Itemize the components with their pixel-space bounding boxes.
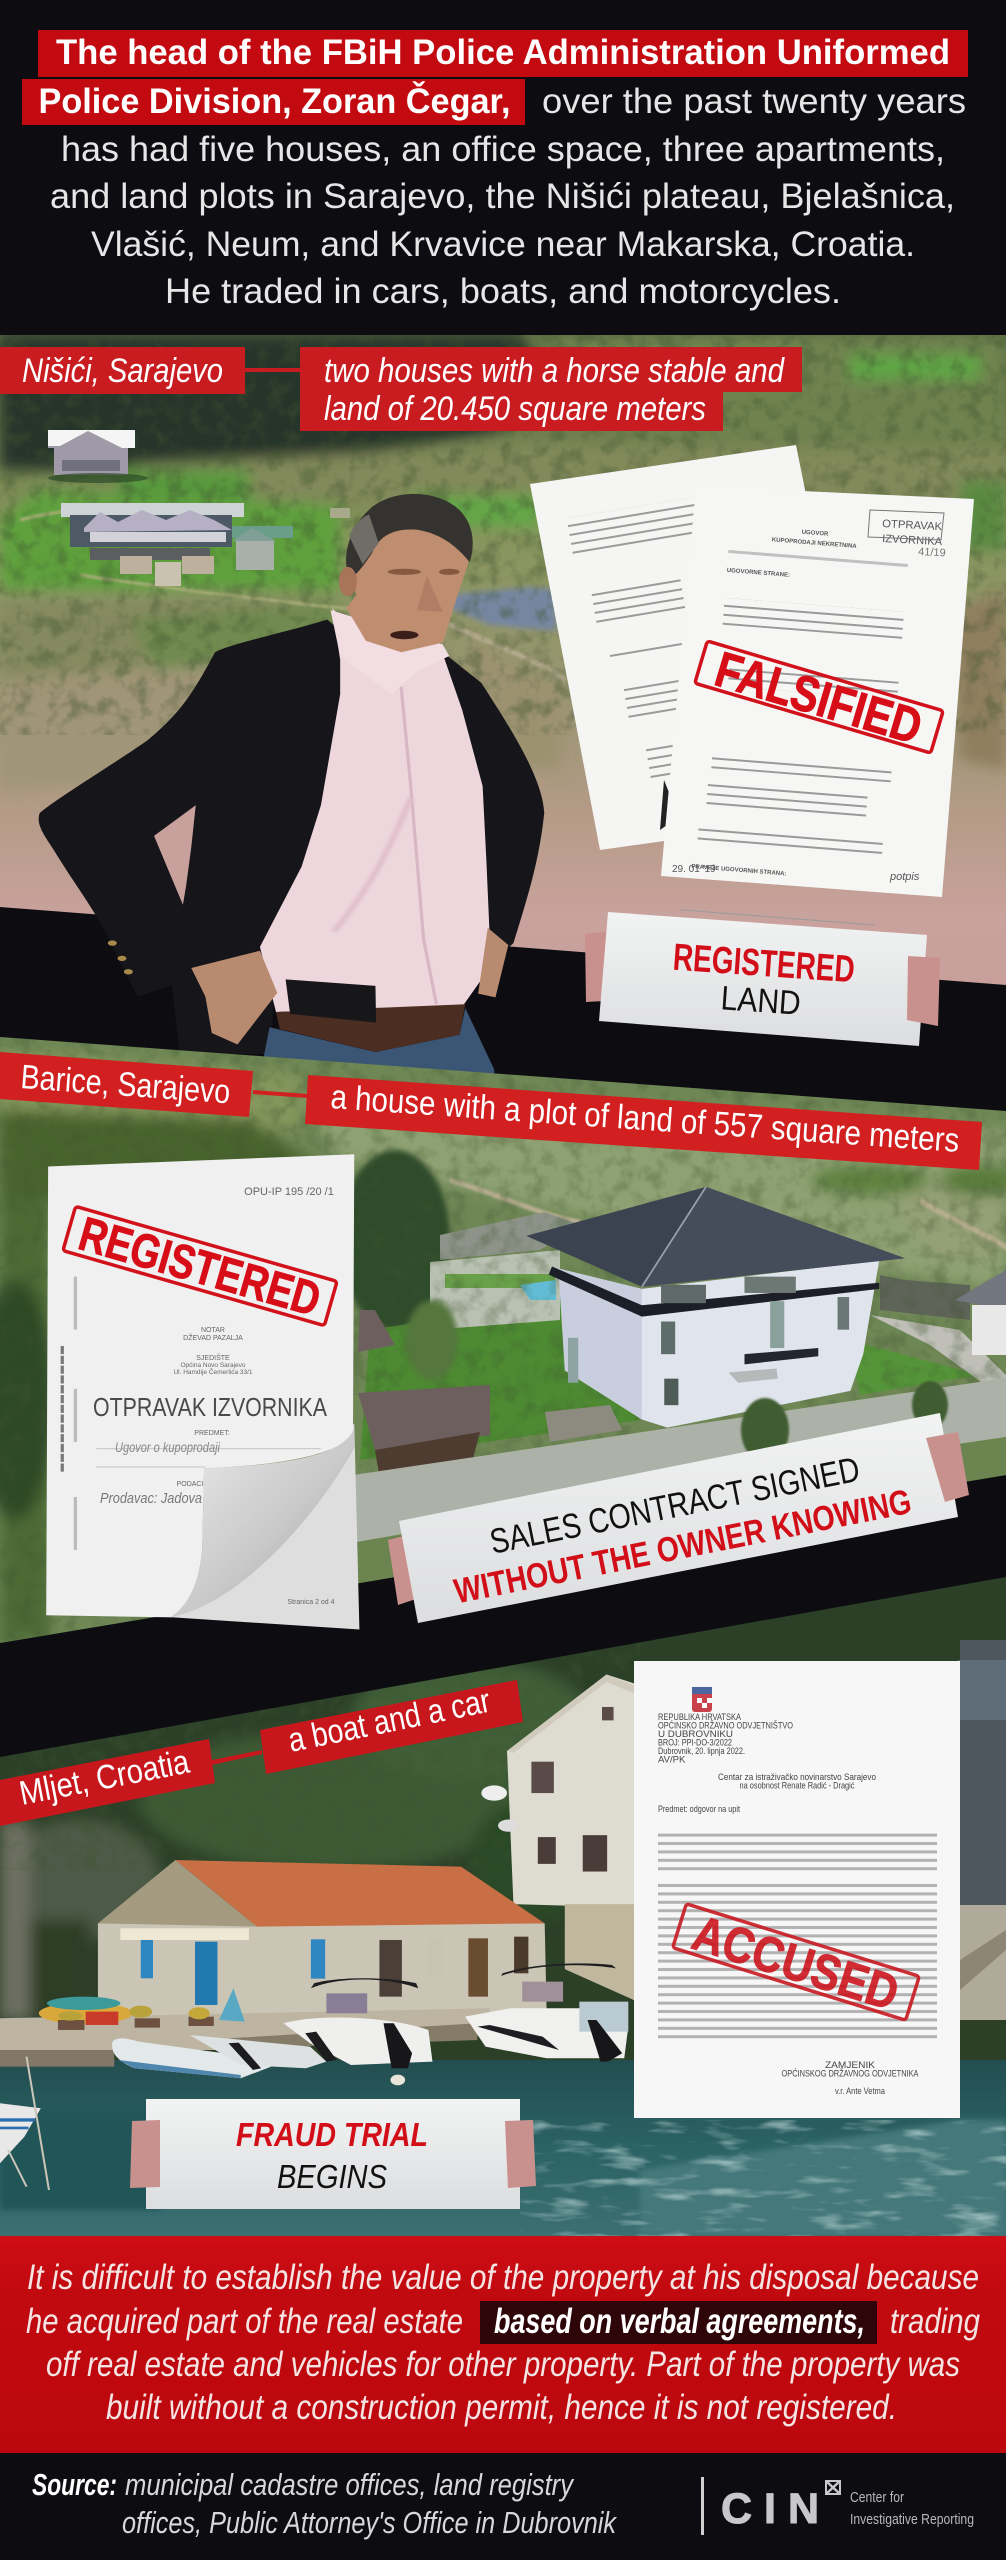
document: notary contract with curled page: OPU-IP 195 /20 /1 — [244, 1186, 334, 1198]
label: two houses with a horse stable: land of 20.450 square meters — [324, 390, 706, 428]
paper: land document front page: 29. 01 '19 — [672, 864, 716, 875]
outboard motors — [228, 2043, 261, 2070]
lake — [449, 587, 556, 631]
document: notary contract with curled page — [46, 1154, 359, 1630]
document: prosecutor letter: v.r. Ante Vetma — [835, 2086, 886, 2097]
stamp: REGISTERED: REGISTERED — [73, 1208, 326, 1327]
paper: land document front page: OTPRAVAK — [882, 518, 943, 533]
panel: Mljet harbour photo — [0, 1570, 1006, 2240]
stamp: FALSIFIED: FALSIFIED — [709, 641, 928, 755]
card: sales contract signed without the owner knowing — [388, 1413, 969, 1623]
intro heading text block: The head of the FBiH Police Administration Uniformed — [56, 33, 950, 72]
document: notary contract with curled page: PREDMET: — [194, 1430, 230, 1437]
paper: land document front page: PRAVEŽE UGOVORNIH STRANA: — [691, 862, 787, 877]
paper: land document front page: IZVORNIKA — [882, 533, 943, 548]
card: registered land: REGISTERED — [672, 937, 856, 991]
label: Barice, Sarajevo: Barice, Sarajevo — [19, 1058, 232, 1111]
highlight: based on verbal agreements: based on verbal agreements, — [494, 2302, 865, 2341]
label: Mljet, Croatia: Mljet, Croatia — [16, 1743, 192, 1813]
label: two houses with a horse stable — [300, 347, 802, 431]
document: notary contract with curled page: Ugovor o kupoprodaji — [115, 1439, 221, 1455]
panel: Nišići landscape photo — [0, 335, 1006, 985]
intro heading text block: Vlašić, Neum, and Krvavice near Makarska, Croatia. — [91, 225, 915, 264]
connector line — [253, 1090, 308, 1098]
card: fraud trial begins — [130, 2099, 536, 2209]
paper: land document back page — [530, 445, 870, 864]
dirt path — [450, 1180, 1006, 1250]
source credit: Source: — [32, 2467, 117, 2502]
paper: land document front page: UGOVOR — [801, 530, 829, 538]
kayaks and planters — [38, 2006, 132, 2024]
document: notary contract with curled page: SJEDIŠTE — [196, 1353, 230, 1362]
logo: CIN Center for Investigative Reporting: Investigative Reporting — [850, 2511, 974, 2528]
document: prosecutor letter: OPĆINSKO DRŽAVNO ODVJETNIŠTVO — [658, 1720, 793, 1732]
document: prosecutor letter: OPĆINSKOG DRŽAVNOG ODVJETNIKA — [782, 2068, 919, 2080]
intro heading text block: over the past twenty years — [542, 82, 966, 121]
white house behind — [481, 1674, 642, 2004]
foliage texture — [0, 1030, 1006, 1650]
label: two houses with a horse stable: two houses with a horse stable and — [324, 352, 785, 390]
paper: land document front page: UGOVORNE STRANE: — [727, 568, 790, 579]
connector line — [245, 368, 300, 372]
paper: land document front page: potpis — [889, 871, 920, 883]
small shed roofs — [358, 1270, 1006, 1480]
document: notary contract with curled page: Stranica 2 od 4 — [287, 1599, 335, 1606]
document: notary contract with curled page: PODACI — [177, 1481, 203, 1488]
foliage texture — [0, 335, 1006, 735]
card: sales contract signed without the owner knowing: WITHOUT THE OWNER KNOWING — [451, 1482, 915, 1611]
document: prosecutor letter: U DUBROVNIKU — [658, 1729, 733, 1740]
document: prosecutor letter — [634, 1661, 960, 2118]
intro heading text block — [22, 30, 968, 311]
card: registered land — [585, 912, 940, 1046]
intro heading text block: and land plots in Sarajevo, the Nišići plateau, Bjelašnica, — [50, 177, 955, 216]
hillside right — [950, 590, 1006, 770]
paper: land document front page — [661, 486, 974, 970]
panel: Barice house photo — [0, 1030, 1006, 1650]
grey fence — [440, 1212, 580, 1260]
document: notary contract with curled page: NOTAR — [201, 1327, 225, 1334]
document: prosecutor letter: Predmet: odgovor na upit — [658, 1804, 740, 1815]
document: notary contract with curled page: Općina Novo Sarajevo — [180, 1362, 246, 1369]
document: notary contract with curled page: DŽEVAD PAZALJA — [183, 1333, 243, 1342]
document: prosecutor letter: Centar za istraživačko novinarstvo Sarajevo — [718, 1772, 876, 1783]
right side building — [958, 1640, 1006, 2020]
label: a boat and a car: a boat and a car — [285, 1682, 493, 1760]
card: fraud trial begins: FRAUD TRIAL — [236, 2116, 428, 2153]
source credit: municipal cadastre offices, land registry — [125, 2467, 575, 2502]
logo: CIN Center for Investigative Reporting: Center for — [850, 2489, 904, 2506]
shrub — [741, 1398, 789, 1462]
panel: red conclusion text block: he acquired part of the real estate — [26, 2302, 463, 2341]
document: notary contract with curled page: OTPRAVAK IZVORNIKA — [93, 1392, 328, 1422]
garden lawn and driveway — [360, 1300, 640, 1460]
trail — [440, 620, 565, 680]
logo: CIN Center for Investigative Reporting: CIN — [721, 2485, 819, 2533]
boats — [112, 2038, 275, 2078]
card: registered land: LAND — [720, 979, 802, 1023]
panel: red conclusion text block: trading — [890, 2302, 980, 2341]
concrete wall — [340, 1378, 1006, 1545]
document: prosecutor letter: Dubrovnik, 20. lipnja 2022. — [658, 1746, 745, 1757]
document: prosecutor letter: ZAMJENIK — [825, 2060, 876, 2071]
moored boat at left — [0, 2103, 41, 2163]
portrait: man in black jacket with a holster — [39, 494, 544, 1092]
white two-storey house with dark roof — [526, 1187, 905, 1428]
pier — [0, 2008, 490, 2050]
stamp: ACCUSED: ACCUSED — [686, 1905, 905, 2021]
document: notary contract with curled page: Ul. Hamdije Čemerlića 33/1 — [173, 1367, 253, 1376]
card: sales contract signed without the owner knowing: SALES CONTRACT SIGNED — [487, 1450, 863, 1562]
logo: CIN Center for Investigative Reporting — [701, 2477, 974, 2535]
document: prosecutor letter: na osobnost Renate Radić - Dragić — [740, 1780, 855, 1792]
intro heading text block: He traded in cars, boats, and motorcycles. — [165, 272, 841, 311]
document: prosecutor letter: AV/PK — [658, 1754, 686, 1766]
house on the left with white roof — [48, 430, 148, 483]
document: prosecutor letter: BROJ: PPI-DO-3/2022 — [658, 1738, 732, 1748]
source credit — [32, 2467, 617, 2540]
large house with horse stable — [61, 503, 350, 586]
dark tree — [340, 1150, 450, 1330]
icon: Croatian coat of arms — [692, 1687, 712, 1712]
panel: red conclusion text block — [0, 2236, 1006, 2453]
label: Nišići, Sarajevo: Nišići, Sarajevo — [22, 352, 223, 390]
stone house with orange roof — [0, 1860, 628, 2190]
source credit: offices, Public Attorney's Office in Dubrovnik — [122, 2505, 617, 2540]
document: prosecutor letter: REPUBLIKA HRVATSKA — [658, 1712, 742, 1723]
connector line — [212, 1750, 262, 1765]
paper: land document front page: 41/19 — [918, 546, 946, 559]
water — [0, 2060, 1006, 2236]
intro heading text block: has had five houses, an office space, three apartments, — [61, 130, 945, 169]
paper: land document front page: KUPOPRODAJI NEKRETNINA — [772, 537, 857, 550]
document: notary contract with curled page: Prodavac: Jadova — [100, 1490, 202, 1507]
card: fraud trial begins: BEGINS — [277, 2158, 387, 2195]
intro heading text block: Police Division, Zoran Čegar, — [38, 81, 510, 121]
